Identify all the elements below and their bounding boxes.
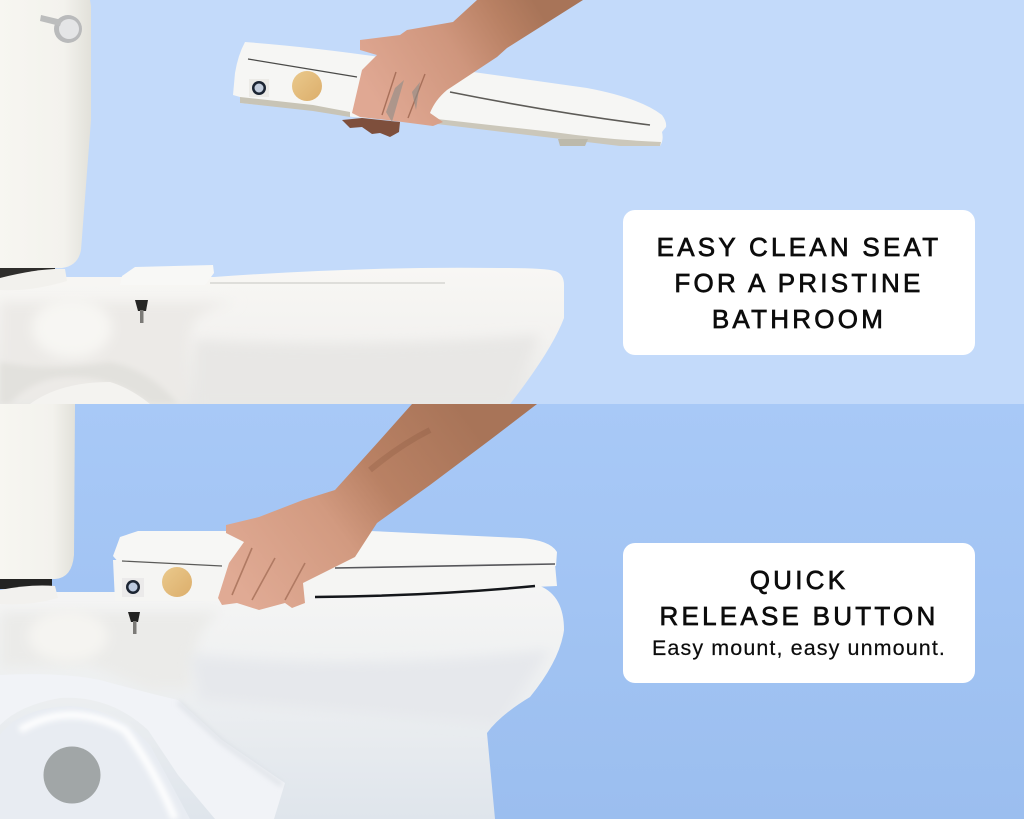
bowl [0, 268, 564, 404]
collar [0, 268, 66, 282]
lid [113, 531, 557, 570]
callout heading: BATHROOM [712, 304, 886, 334]
panel: bottom background [0, 404, 1024, 819]
lid and ring [233, 42, 666, 146]
mounting bolt [128, 612, 140, 634]
toilet: top panel [0, 0, 564, 404]
mounting bolt [135, 300, 148, 323]
arm and hand: bottom panel [218, 404, 537, 610]
toilet: bottom panel [0, 404, 564, 819]
drain hole [44, 746, 100, 804]
callout heading: FOR A PRISTINE [674, 268, 924, 298]
tank [0, 0, 91, 268]
callout heading [659, 565, 939, 631]
collar [0, 586, 58, 604]
bamboo button [292, 71, 322, 101]
bamboo button [162, 567, 192, 597]
callout heading: EASY CLEAN SEAT [657, 232, 941, 262]
flush handle [40, 15, 82, 43]
quick release port [122, 578, 144, 597]
tank gasket [0, 268, 55, 278]
tank [0, 404, 75, 579]
callout: quick release button [623, 543, 975, 683]
tank gasket [0, 579, 52, 589]
panel: top background [0, 0, 1024, 404]
callout subtext: Easy mount, easy unmount. [652, 636, 946, 660]
seat: lifted [233, 42, 666, 146]
callout heading: QUICK [750, 565, 848, 595]
seat: lowered [113, 531, 557, 601]
callout: easy clean seat [623, 210, 975, 355]
hand: top panel [342, 0, 583, 137]
ring [113, 560, 557, 601]
bowl [0, 586, 564, 819]
callout heading: RELEASE BUTTON [659, 601, 939, 631]
quick release port [249, 79, 269, 97]
callout heading [657, 232, 941, 334]
trapway ridge [136, 690, 285, 819]
hinge block [122, 265, 214, 277]
